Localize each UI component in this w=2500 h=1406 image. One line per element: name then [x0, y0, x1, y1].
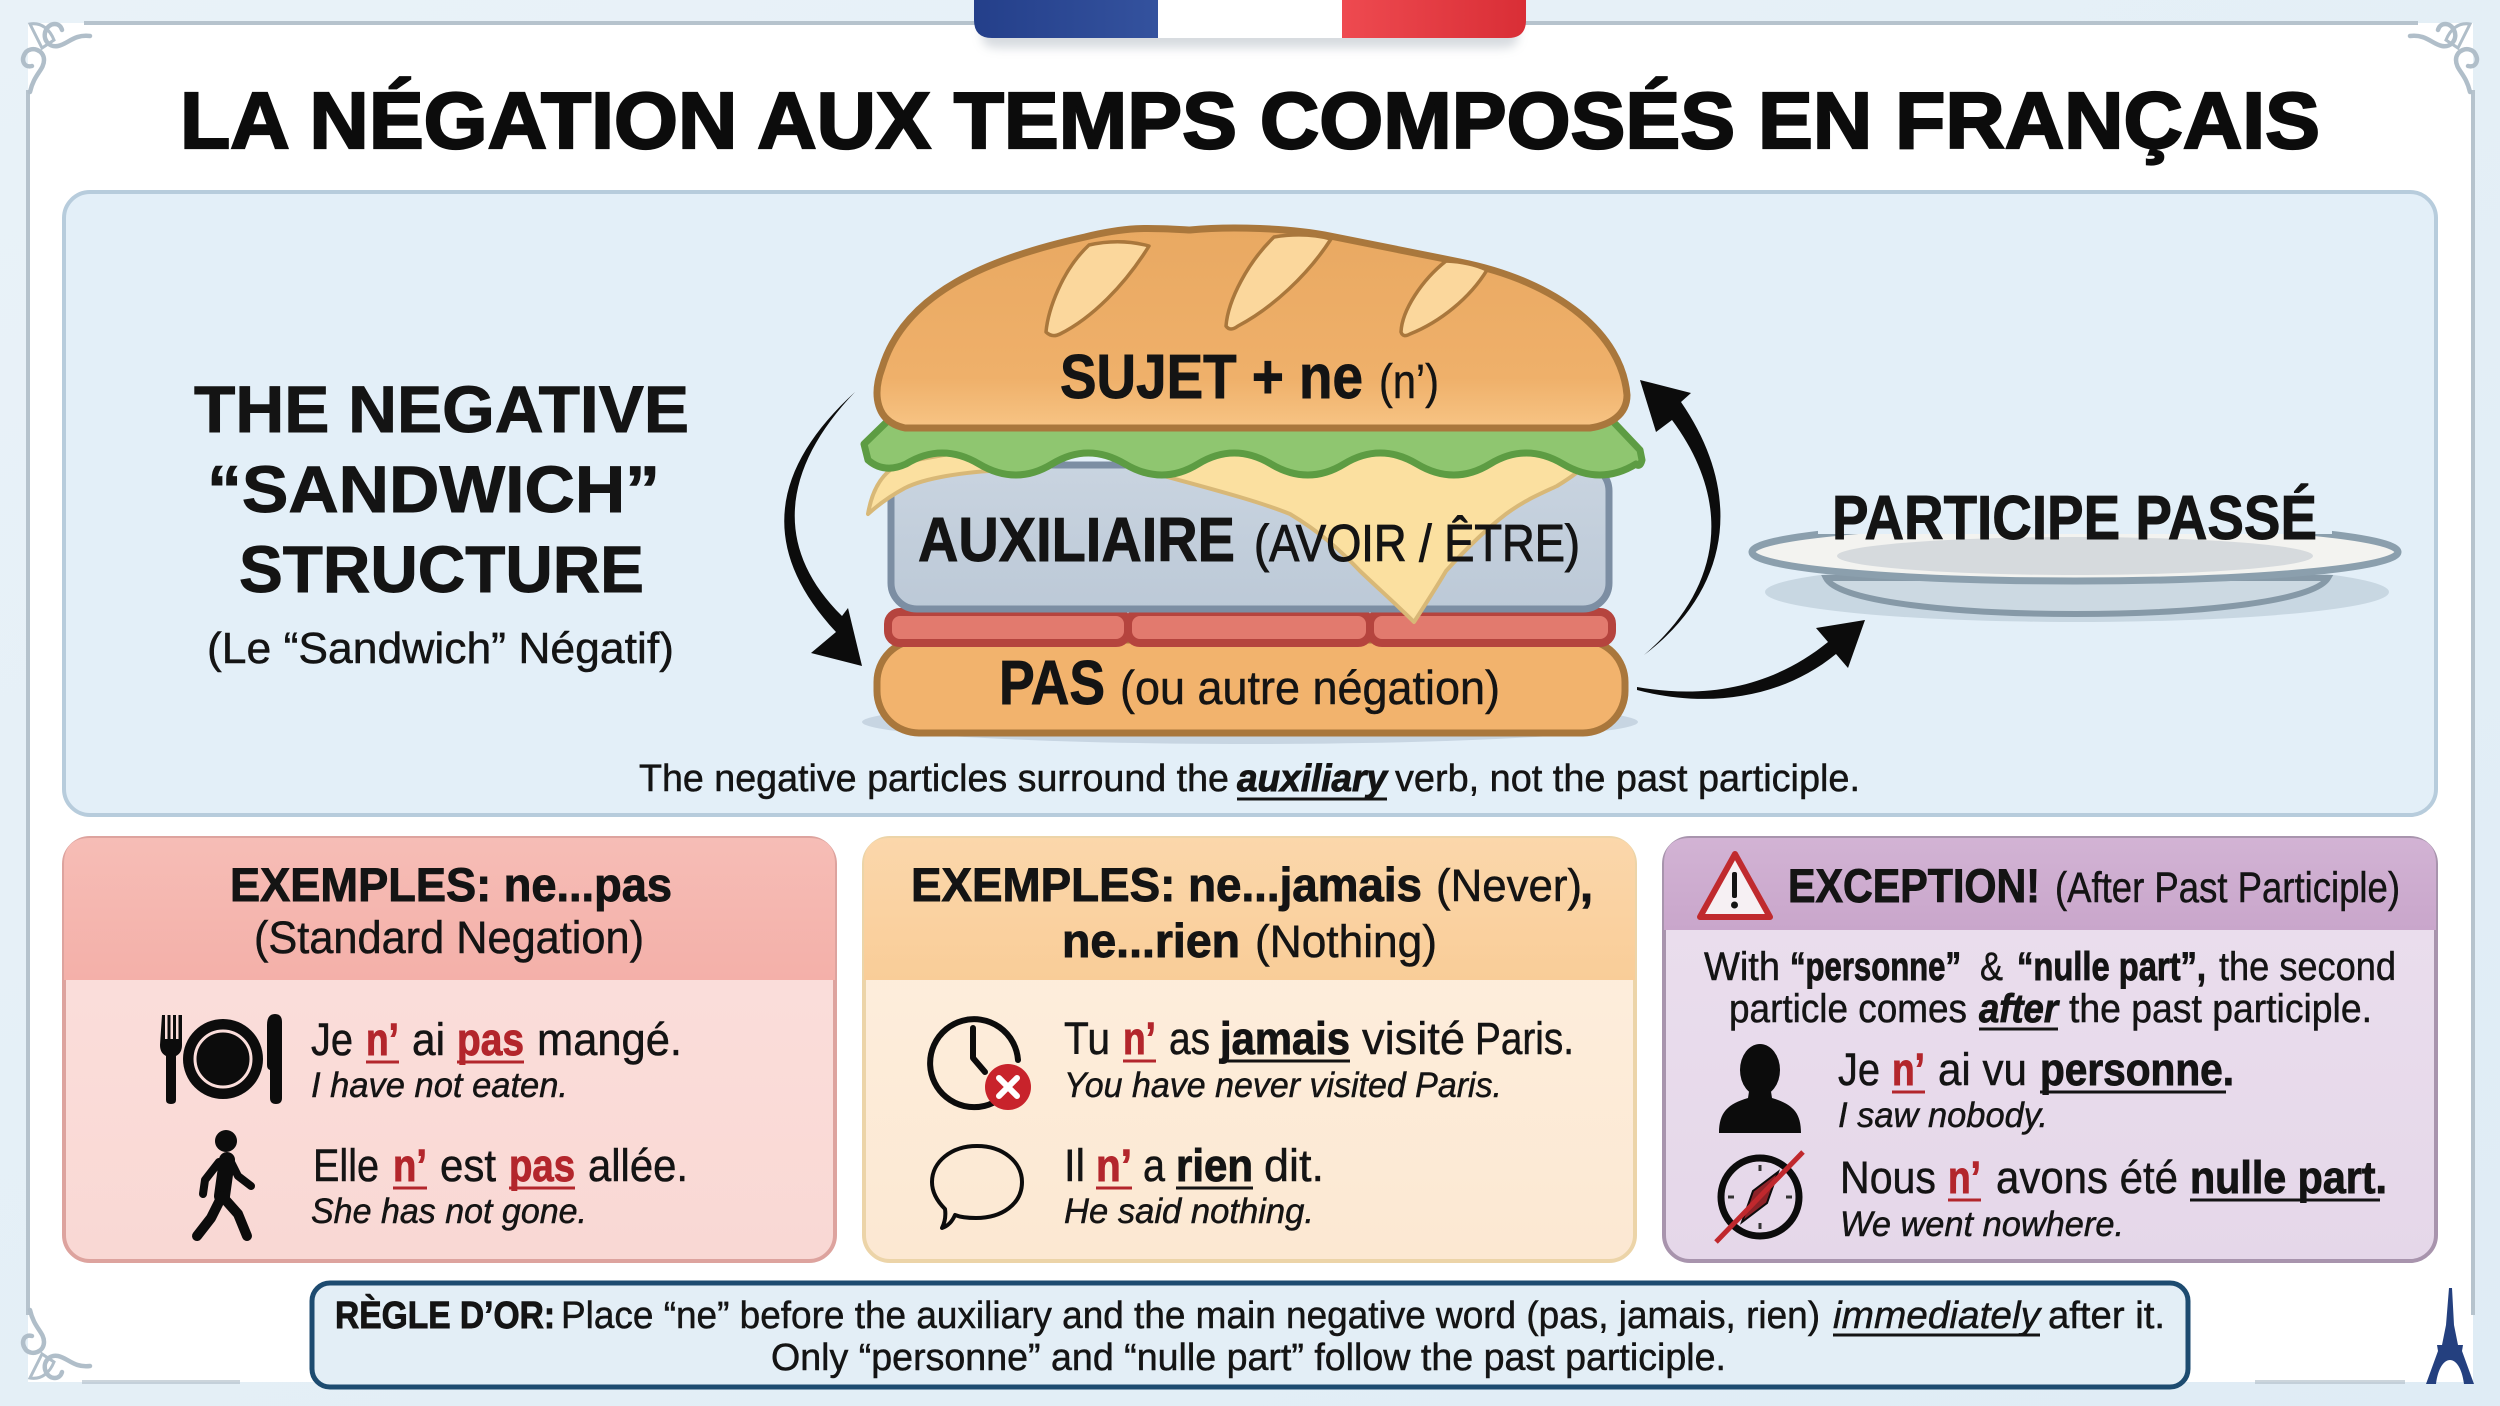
card header: [864, 838, 1635, 980]
example 3: [1064, 1013, 1574, 1105]
example 3: Paris.: [1475, 1013, 1574, 1064]
example 6: nulle part.: [2190, 1152, 2387, 1203]
plate: participe passé: [1752, 505, 2398, 622]
card heading: (Nothing): [1255, 916, 1437, 967]
callout line 1: RÈGLE D’OR:: [335, 1293, 555, 1337]
icon: warning triangle: [1700, 854, 1770, 917]
example 2: n’: [393, 1140, 427, 1191]
exception rule text: &: [1980, 945, 2003, 989]
exception rule text: particle comes: [1729, 987, 1967, 1031]
example 3: Tu: [1064, 1013, 1110, 1064]
example 6: [1840, 1152, 2387, 1244]
heading: negative sandwich structure: “SANDWICH”: [207, 452, 660, 526]
exception rule text: “personne”: [1790, 945, 1961, 989]
icon: crossed-out compass: [1716, 1152, 1803, 1242]
icon: person silhouette: [1719, 1044, 1801, 1133]
example 3: visité: [1362, 1013, 1465, 1064]
exception rule text: the second: [2219, 945, 2396, 989]
label: auxiliaire: AUXILIAIRE: [918, 506, 1235, 575]
French flag ribbon: [974, 0, 1526, 48]
arrow: pas up to subject: [1640, 380, 1720, 655]
panel: exception: [1664, 838, 2436, 1261]
example 3: You have never visited Paris.: [1064, 1066, 1502, 1105]
example 2: Elle: [313, 1140, 379, 1191]
example 5: personne.: [2040, 1044, 2234, 1095]
exception rule text: With: [1704, 945, 1780, 989]
heading: negative sandwich structure: (Le “Sandwich” Négatif): [207, 624, 674, 673]
example 4: dit.: [1264, 1140, 1324, 1191]
example 5: Je: [1838, 1044, 1880, 1095]
corner ornament: top left: [23, 24, 90, 92]
example 1: [311, 1014, 682, 1105]
icon: clock with cross: [930, 1019, 1031, 1110]
heading: negative sandwich structure: STRUCTURE: [239, 532, 644, 606]
example 4: He said nothing.: [1064, 1192, 1314, 1231]
top bun: [877, 228, 1627, 428]
icon: plate and cutlery: [160, 1014, 282, 1104]
heading: negative sandwich structure: THE NEGATIVE: [194, 372, 689, 446]
example 2: She has not gone.: [311, 1192, 587, 1231]
exception rule text: after: [1979, 987, 2060, 1031]
example 2: pas: [509, 1140, 575, 1191]
card heading: [911, 858, 1593, 967]
callout line 2: Only “personne” and “nulle part” follow the past participle.: [771, 1337, 1726, 1379]
example 2: allée.: [588, 1140, 688, 1191]
exception rule text: [1704, 945, 2396, 1031]
label: auxiliaire: (AVOIR / ÊTRE): [1254, 515, 1580, 573]
arrow: subject down to pas: [784, 392, 862, 666]
callout line 1: after it.: [2048, 1295, 2165, 1337]
example 4: n’: [1096, 1140, 1132, 1191]
label: pas: (ou autre négation): [1120, 661, 1500, 714]
card heading: EXCEPTION!: [1788, 859, 2040, 912]
icon: Eiffel tower: [2426, 1288, 2474, 1384]
card heading: (After Past Participle): [2055, 864, 2400, 912]
heading: negative sandwich structure: [194, 372, 689, 673]
example 5: [1838, 1044, 2234, 1135]
example 3: n’: [1123, 1013, 1156, 1064]
example 6: We went nowhere.: [1840, 1205, 2124, 1244]
card header: [1664, 838, 2436, 930]
example 2: est: [440, 1140, 496, 1191]
icon: speech bubble: [932, 1146, 1022, 1228]
example 6: n’: [1948, 1152, 1981, 1203]
example 4: Il: [1064, 1140, 1085, 1191]
bread scores: [1046, 235, 1487, 336]
example 1: mangé.: [537, 1014, 682, 1065]
label: sujet + ne: (n’): [1379, 356, 1439, 409]
icon: walking person: [197, 1130, 251, 1236]
auxiliary filling: [891, 465, 1609, 609]
example 5: I saw nobody.: [1838, 1096, 2048, 1135]
exception rule text: “nulle part”,: [2017, 945, 2206, 989]
card subheading: (Standard Negation): [254, 912, 644, 963]
example 4: [1064, 1140, 1324, 1231]
example 3: as: [1169, 1013, 1210, 1064]
example 1: Je: [311, 1014, 353, 1065]
example 6: Nous: [1840, 1152, 1936, 1203]
example 2: [311, 1140, 688, 1231]
arrow: to past participle: [1637, 620, 1865, 699]
cheese: [868, 440, 1590, 622]
example 4: rien: [1176, 1140, 1253, 1191]
exception rule text: the past participle.: [2069, 987, 2372, 1031]
panel: exemples ne...jamais, ne...rien: [864, 838, 1635, 1261]
example 5: ai vu: [1938, 1044, 2027, 1095]
example 1: ai: [412, 1014, 445, 1065]
lettuce: [864, 412, 1642, 475]
label: sujet + ne: SUJET + ne: [1060, 343, 1363, 412]
example 1: I have not eaten.: [311, 1066, 568, 1105]
card heading: EXEMPLES: ne...pas: [230, 858, 672, 911]
corner ornament: bottom left: [23, 1310, 90, 1378]
panel: sandwich structure: [64, 192, 2436, 815]
card header: [64, 838, 835, 980]
title: LA NÉGATION AUX TEMPS COMPOSÉS EN FRANÇAIS: [180, 76, 2320, 165]
panel: exemples ne...pas: [64, 838, 835, 1261]
label: participe passé: PARTICIPE PASSÉ: [1832, 484, 2317, 553]
card heading: ne...rien: [1062, 914, 1240, 967]
tomato slices: [888, 612, 1612, 643]
card heading: (Never): [1436, 860, 1582, 911]
callout line 1: immediately: [1833, 1295, 2042, 1337]
corner ornament: top right: [2410, 24, 2477, 92]
bottom bun: [877, 640, 1625, 733]
example 1: n’: [366, 1014, 399, 1065]
callout: règle d'or: [312, 1283, 2188, 1387]
card heading: EXEMPLES: ne...jamais: [911, 858, 1422, 911]
example 5: n’: [1892, 1044, 1925, 1095]
label: pas: PAS: [999, 649, 1105, 718]
sandwich illustration: [862, 228, 1642, 744]
example 4: a: [1143, 1140, 1166, 1191]
example 3: jamais: [1219, 1013, 1350, 1064]
caption: The negative particles surround the: [639, 758, 1229, 800]
callout line 1: Place “ne” before the auxiliary and the main negative word (pas, jamais, rien): [561, 1295, 1820, 1337]
card heading: ,: [1580, 858, 1593, 911]
caption: auxiliary: [1237, 758, 1389, 800]
caption: verb, not the past participle.: [1395, 758, 1860, 800]
example 6: avons été: [1996, 1152, 2178, 1203]
example 1: pas: [457, 1014, 524, 1065]
